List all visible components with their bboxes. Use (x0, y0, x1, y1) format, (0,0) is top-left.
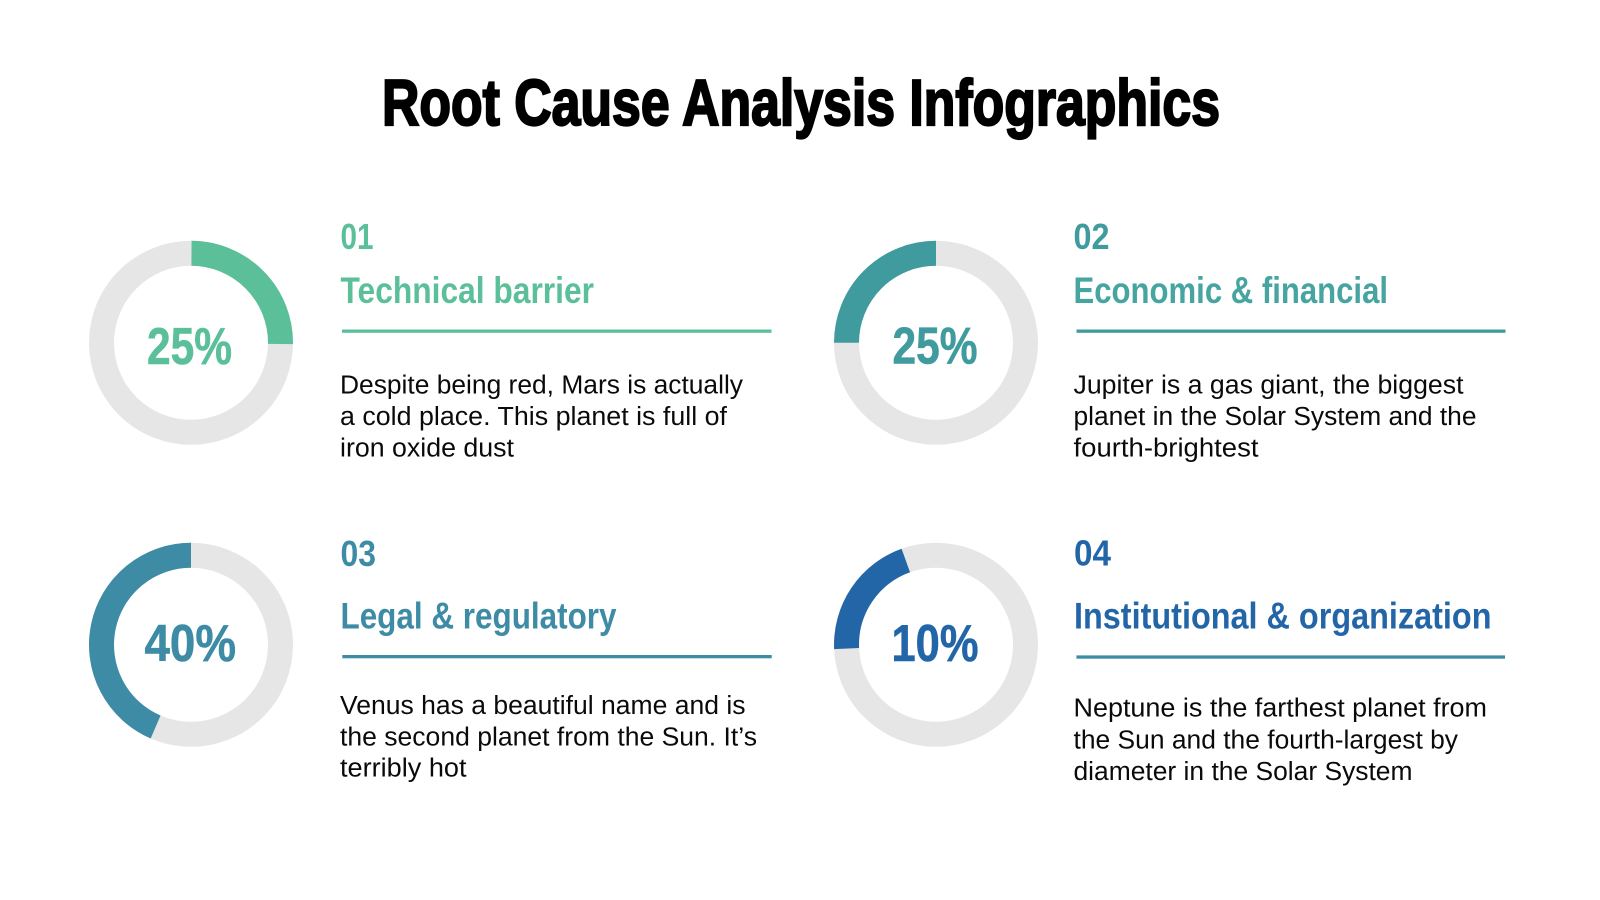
body text: fourth-brightest (1074, 435, 1258, 463)
panel: 01 technical barrier (102, 216, 772, 463)
body text: a cold place. This planet is full of (340, 403, 728, 431)
divider line (1076, 330, 1506, 333)
divider line (1076, 655, 1505, 659)
donut chart: 10%: 10% (892, 615, 978, 673)
panel: 04 institutional and organization (846, 533, 1505, 786)
body text: diameter in the Solar System (1074, 758, 1412, 786)
body text: Neptune is the farthest planet from (1074, 695, 1487, 723)
body text (340, 692, 757, 783)
body text: Jupiter is a gas giant, the biggest (1074, 372, 1464, 400)
title: Root Cause Analysis Infographics (382, 66, 1220, 139)
donut chart: 25%: 25% (892, 318, 978, 376)
panel: 02 economic and financial (846, 216, 1506, 463)
divider line (342, 655, 772, 658)
heading: legal and regulatory: Legal & regulatory (340, 595, 617, 637)
body text (340, 372, 743, 463)
donut chart: 25% (846, 253, 1026, 432)
donut chart: 40%: 40% (144, 615, 236, 673)
number 01: 01 (340, 216, 374, 257)
donut chart: 40% (102, 555, 280, 734)
number 02: 02 (1074, 216, 1110, 257)
heading: institutional and organization: Institutional & organization (1074, 594, 1492, 636)
divider line (342, 330, 772, 333)
number 03: 03 (340, 533, 376, 574)
body text (1074, 695, 1487, 786)
donut chart: 25% (102, 253, 281, 432)
number 04: 04 (1074, 533, 1111, 574)
body text: the Sun and the fourth-largest by (1074, 726, 1458, 754)
body text: iron oxide dust (340, 435, 514, 463)
panel: 03 legal and regulatory (102, 533, 772, 783)
body text: Venus has a beautiful name and is (340, 692, 746, 720)
body text (1074, 372, 1476, 463)
body text: planet in the Solar System and the (1074, 403, 1476, 431)
donut chart: 10% (846, 555, 1026, 734)
donut chart: 25%: 25% (147, 318, 232, 376)
body text: terribly hot (340, 755, 466, 783)
body text: Despite being red, Mars is actually (340, 372, 743, 400)
heading: technical barrier: Technical barrier (340, 269, 594, 311)
heading: economic and financial: Economic & financial (1074, 269, 1388, 311)
body text: the second planet from the Sun. It’s (340, 723, 757, 751)
